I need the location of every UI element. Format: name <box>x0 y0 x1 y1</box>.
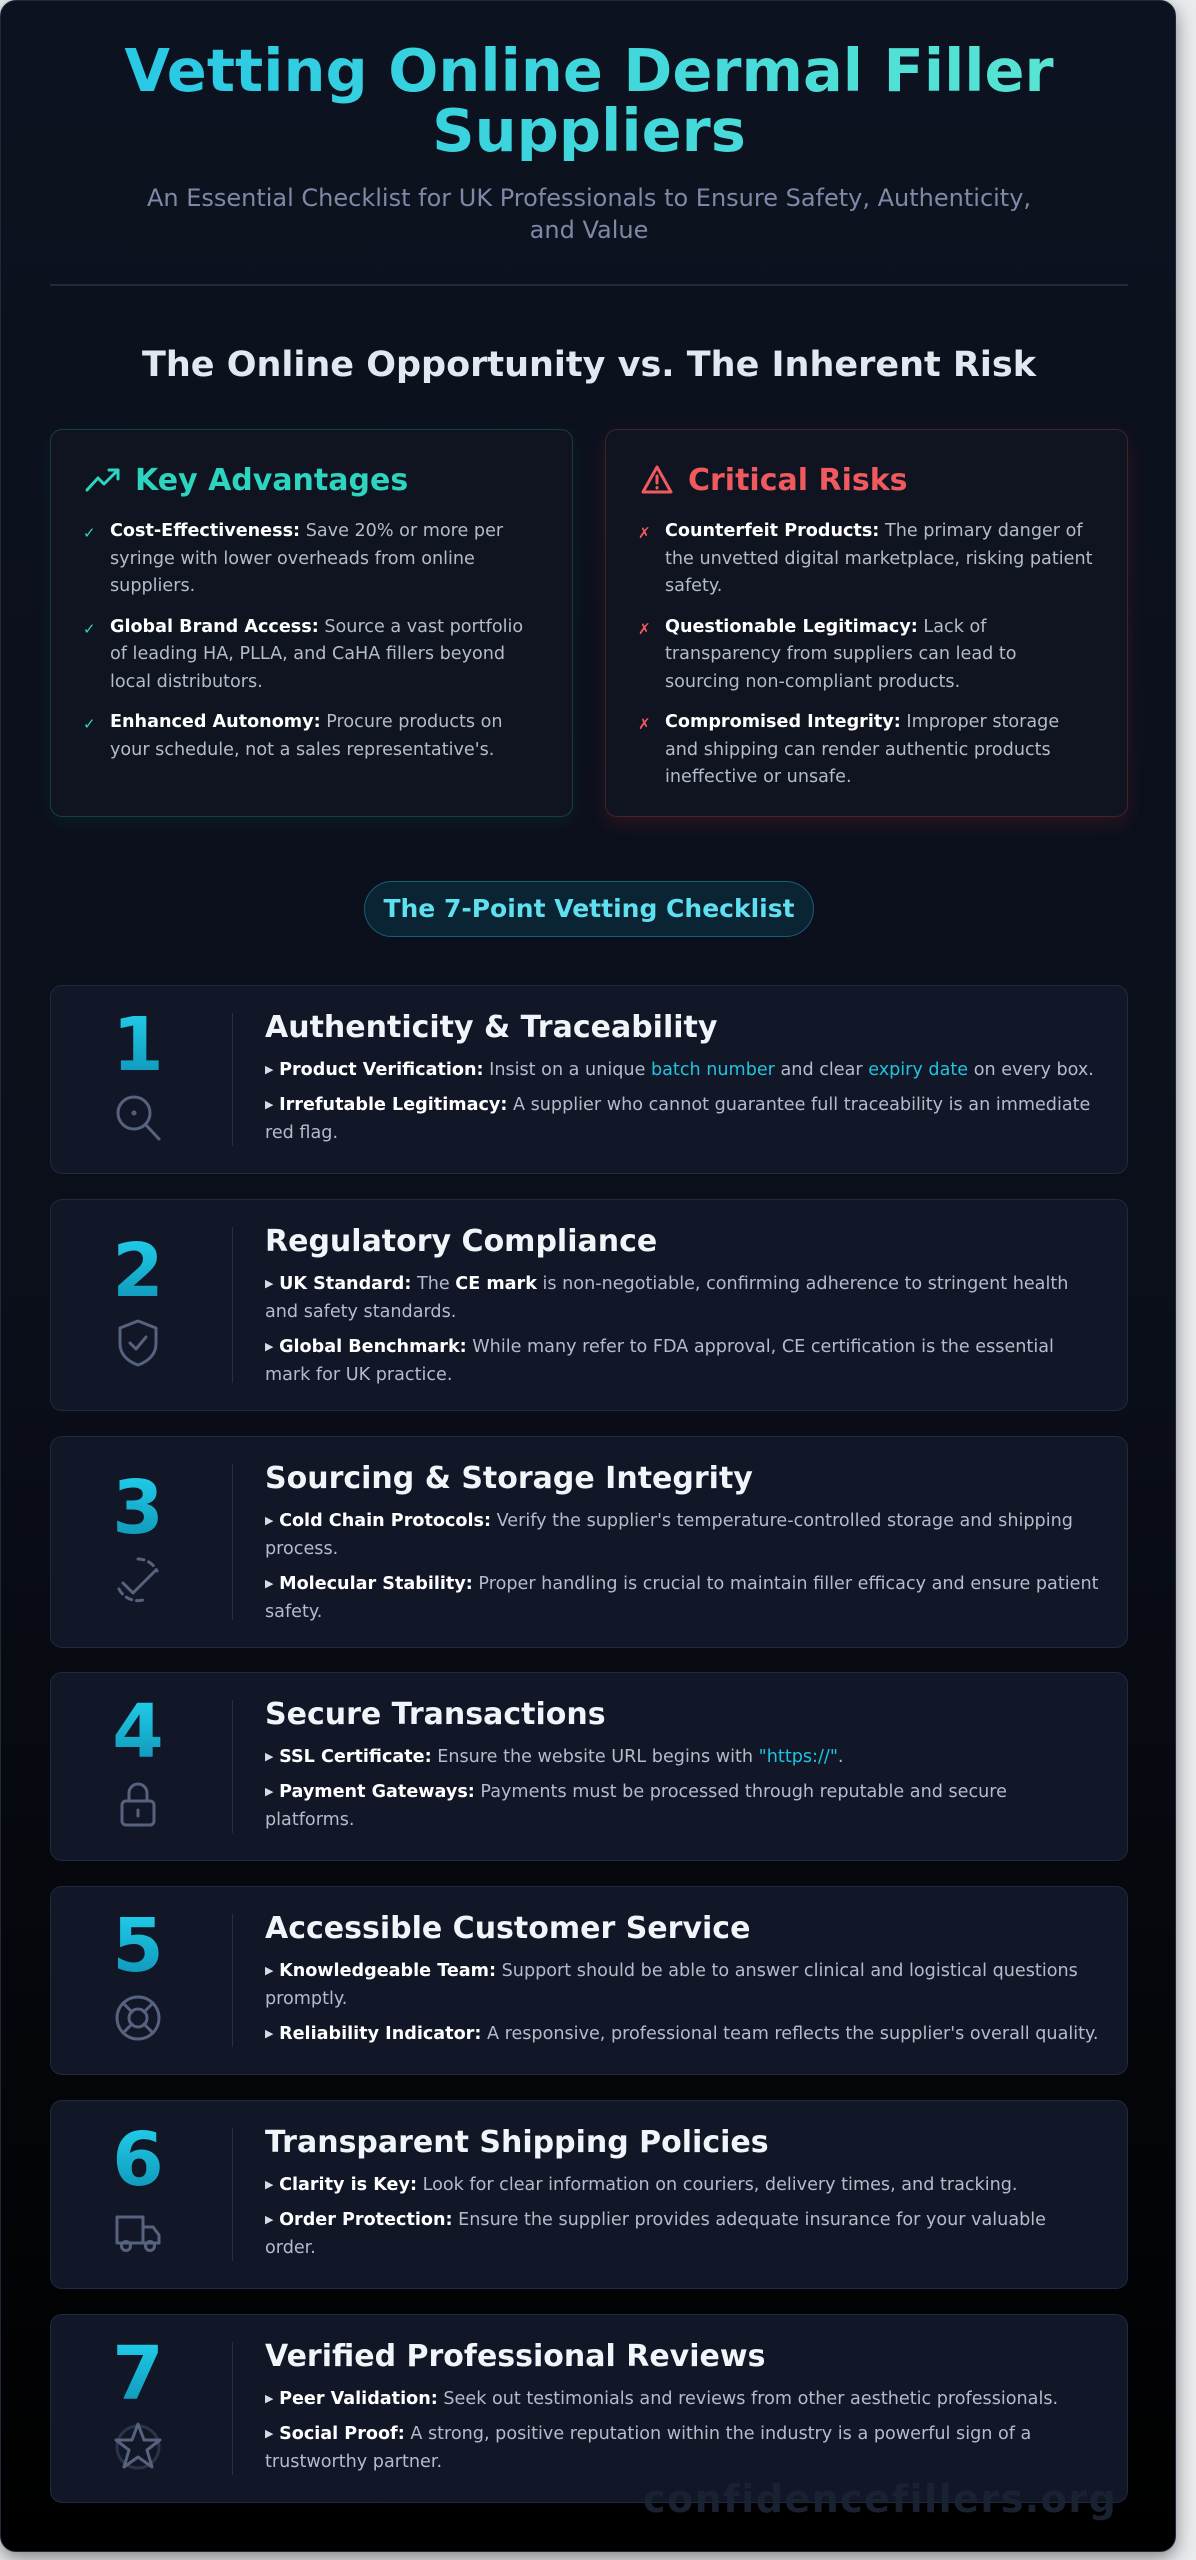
item: cost: suppliers. <box>110 576 195 596</box>
card 7: Verified Professional Reviews <box>265 2339 765 2374</box>
panel: key advantages <box>50 429 573 817</box>
title: Vetting Online Dermal Filler <box>124 36 1054 105</box>
item: brand: local distributors. <box>110 672 263 692</box>
panel: critical risks <box>605 429 1128 817</box>
card 6: ▶ Clarity is Key: Look for clear information on couriers, delivery times, and tracking. <box>265 2175 1018 2195</box>
card 4: Secure Transactions <box>265 1697 606 1732</box>
card 5: 5 <box>112 1903 164 1989</box>
item: counterfeit: Counterfeit Products: The primary danger of <box>665 521 1083 541</box>
item: autonomy <box>83 712 503 760</box>
card 6: ▶ Order Protection: Ensure the supplier provides adequate insurance for your valuable <box>265 2210 1046 2230</box>
item: legitimacy <box>638 616 1017 692</box>
card 4: 4 <box>112 1689 164 1775</box>
card 4: ▶ Payment Gateways: Payments must be processed through reputable and secure <box>265 1782 1007 1802</box>
heading: critical risks: Critical Risks <box>688 462 908 498</box>
card 4: platforms. <box>265 1810 355 1830</box>
item: autonomy: your schedule, not a sales representative's. <box>110 740 494 760</box>
card 6: order. <box>265 2238 316 2258</box>
pill heading: checklist: The 7-Point Vetting Checklist <box>383 894 795 923</box>
card 2: ▶ Global Benchmark: While many refer to FDA approval, CE certification is the essential <box>265 1337 1054 1357</box>
item: counterfeit: ✗ <box>638 524 651 542</box>
card 2 <box>50 1199 1128 1411</box>
card 5: Accessible Customer Service <box>265 1911 750 1946</box>
card 1: ▶ Irrefutable Legitimacy: A supplier who cannot guarantee full traceability is an immediate red flag. <box>265 1095 1090 1143</box>
icon: lock <box>120 1782 156 1826</box>
card 5: ▶ Reliability Indicator: A responsive, professional team reflects the supplier's overall quality. <box>265 2024 1099 2044</box>
item: brand: Global Brand Access: Source a vast portfolio <box>110 616 523 636</box>
item: cost: syringe with lower overheads from online <box>110 548 475 568</box>
item: autonomy: Enhanced Autonomy: Procure products on <box>110 712 503 732</box>
item: brand: ✓ <box>83 620 96 638</box>
icon: dashed check <box>118 1558 158 1602</box>
item: integrity: ineffective or unsafe. <box>665 767 852 787</box>
heading: key advantages: Key Advantages <box>135 462 408 498</box>
icon: shield <box>118 1320 158 1366</box>
card 5: ▶ Knowledgeable Team: Support should be able to answer clinical and logistical questions promptly. <box>265 1961 1078 2009</box>
icon: star <box>114 2422 162 2470</box>
icon: life buoy <box>116 1996 160 2040</box>
card 1: Authenticity & Traceability <box>265 1010 717 1045</box>
item: integrity: ✗ <box>638 715 651 733</box>
card 2: Regulatory Compliance <box>265 1224 657 1259</box>
card 3: Sourcing & Storage Integrity <box>265 1461 753 1496</box>
subtitle: An Essential Checklist for UK Professionals to Ensure Safety, Authenticity, and Value <box>147 184 1031 244</box>
item: cost <box>83 521 504 596</box>
icon: truck <box>116 2216 160 2252</box>
item: legitimacy: ✗ <box>638 620 651 638</box>
icon: search <box>116 1096 160 1141</box>
pill heading: checklist <box>364 881 814 937</box>
item: integrity: Compromised Integrity: Improper storage <box>665 712 1059 732</box>
item: legitimacy: sourcing non-compliant products. <box>665 672 960 692</box>
card 1: ▶ Product Verification: Insist on a unique batch number and clear expiry date on every box. <box>265 1060 1094 1080</box>
item: integrity <box>638 712 1059 787</box>
card 2: mark for UK practice. <box>265 1365 452 1385</box>
title <box>1 41 1177 161</box>
card 6: Transparent Shipping Policies <box>265 2125 769 2160</box>
item: counterfeit <box>638 521 1092 596</box>
watermark: confidencefillers.org <box>643 2477 1117 2521</box>
item: cost: ✓ <box>83 524 96 542</box>
item: legitimacy: Questionable Legitimacy: Lack of <box>665 616 986 636</box>
item: autonomy: ✓ <box>83 715 96 733</box>
item: counterfeit: the unvetted digital marketplace, risking patient <box>665 548 1092 568</box>
title: Suppliers <box>432 96 746 165</box>
card 1: 1 <box>112 1002 164 1088</box>
card 3: 3 <box>112 1465 164 1551</box>
card 7: ▶ Peer Validation: Seek out testimonials and reviews from other aesthetic professionals. <box>265 2389 1058 2409</box>
card 1 <box>50 985 1128 1174</box>
item: integrity: and shipping can render authentic products <box>665 740 1051 760</box>
item: cost: Cost-Effectiveness: Save 20% or more per <box>110 521 503 541</box>
card 7: 7 <box>112 2331 164 2417</box>
card 3 <box>50 1436 1128 1648</box>
card 4 <box>50 1672 1128 1861</box>
item: counterfeit: safety. <box>665 576 722 596</box>
card 2: ▶ UK Standard: The CE mark is non-negotiable, confirming adherence to stringent health and safety standards. <box>265 1274 1068 1322</box>
card 3: ▶ Cold Chain Protocols: Verify the supplier's temperature-controlled storage and shipping process. <box>265 1511 1073 1559</box>
item: brand <box>83 616 523 692</box>
card 3: ▶ Molecular Stability: Proper handling is crucial to maintain filler efficacy and ensure patient safety. <box>265 1574 1098 1622</box>
item: brand: of leading HA, PLLA, and CaHA fillers beyond <box>110 644 505 664</box>
card 5 <box>50 1886 1128 2075</box>
card 2: 2 <box>112 1228 164 1314</box>
card 6 <box>50 2100 1128 2289</box>
card 7: ▶ Social Proof: A strong, positive reputation within the industry is a powerful sign of a trustworthy partner. <box>265 2424 1031 2472</box>
section heading: The Online Opportunity vs. The Inherent Risk <box>142 345 1036 385</box>
card 6: 6 <box>112 2117 164 2203</box>
item: legitimacy: transparency from suppliers can lead to <box>665 644 1017 664</box>
card 4: ▶ SSL Certificate: Ensure the website URL begins with "https://". <box>265 1747 844 1767</box>
card 7 <box>50 2314 1128 2503</box>
